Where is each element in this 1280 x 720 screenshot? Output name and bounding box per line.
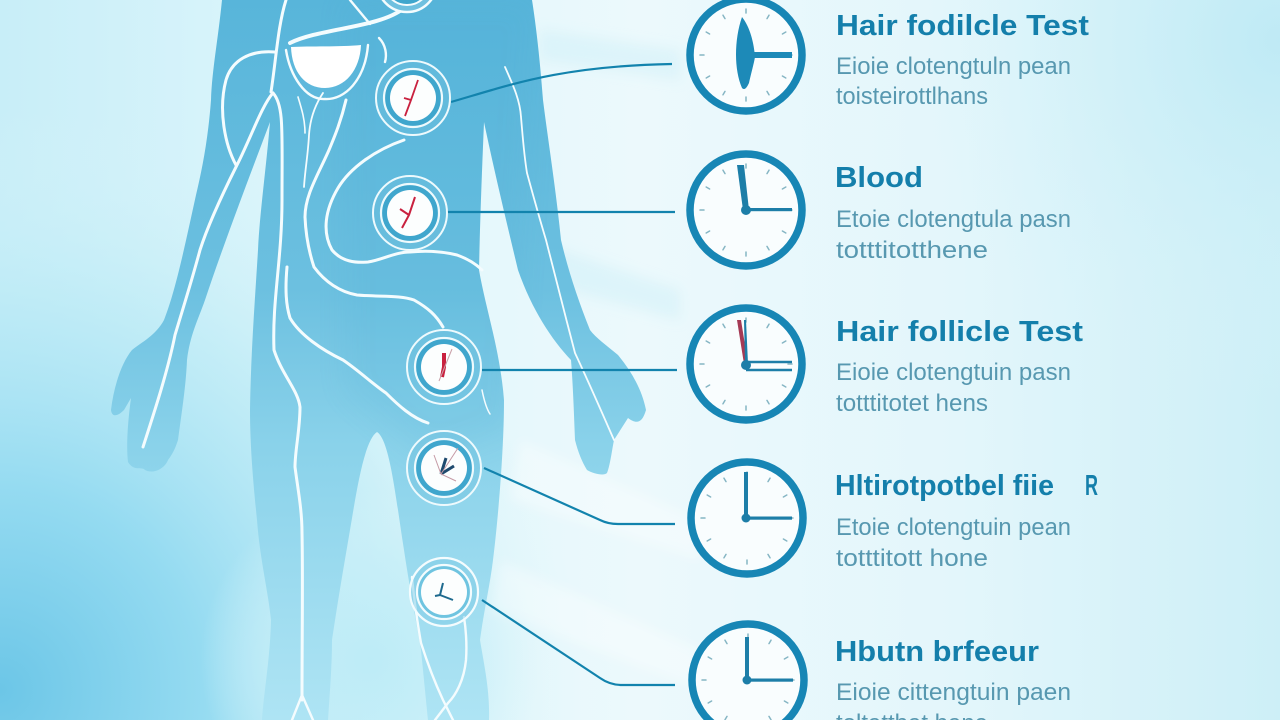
- clock 4: [691, 462, 803, 574]
- label 4: Hltirotpotbel fiie: [835, 470, 1054, 502]
- label 2: [835, 162, 1071, 264]
- clock 5: [692, 624, 804, 720]
- white half disc: organ: [291, 45, 361, 88]
- clock 1: [690, 0, 802, 111]
- label 3: Eioie clotengtuin pasn: [836, 359, 1071, 386]
- marker 3: [407, 330, 481, 404]
- white vessel lines: [143, 0, 614, 720]
- marker 5: [410, 558, 478, 626]
- label 1: Eioie clotengtuln pean: [836, 53, 1071, 80]
- label 3: totttitotet hens: [836, 390, 988, 417]
- marker 2: [373, 176, 447, 250]
- label 5: [835, 636, 1071, 720]
- connector lines: [447, 64, 677, 685]
- label 4: Etoie clotengtuin pean: [836, 514, 1071, 541]
- clock 3: [690, 308, 802, 420]
- label 3: [836, 316, 1083, 417]
- label 1: [836, 10, 1089, 110]
- label 2: Etoie clotengtula pasn: [836, 206, 1071, 233]
- label 4: R: [1085, 470, 1098, 502]
- label 5: Hbutn brfeeur: [835, 636, 1039, 668]
- ring marker: chest top: [377, 0, 437, 12]
- label 1: toisteirottlhans: [836, 83, 988, 110]
- label 3: Hair follicle Test: [836, 316, 1083, 348]
- label 1: Hair fodilcle Test: [836, 10, 1089, 42]
- marker 1: [376, 61, 450, 135]
- marker 4: [407, 431, 481, 505]
- label 4: [835, 470, 1098, 572]
- clock 2: [690, 154, 802, 266]
- human body silhouette: [111, 0, 646, 720]
- label 2: Blood: [835, 162, 923, 194]
- label 4: totttitott hone: [836, 545, 988, 572]
- label 5: Eioie cittengtuin paen: [836, 679, 1071, 706]
- label 2: totttitotthene: [836, 237, 988, 264]
